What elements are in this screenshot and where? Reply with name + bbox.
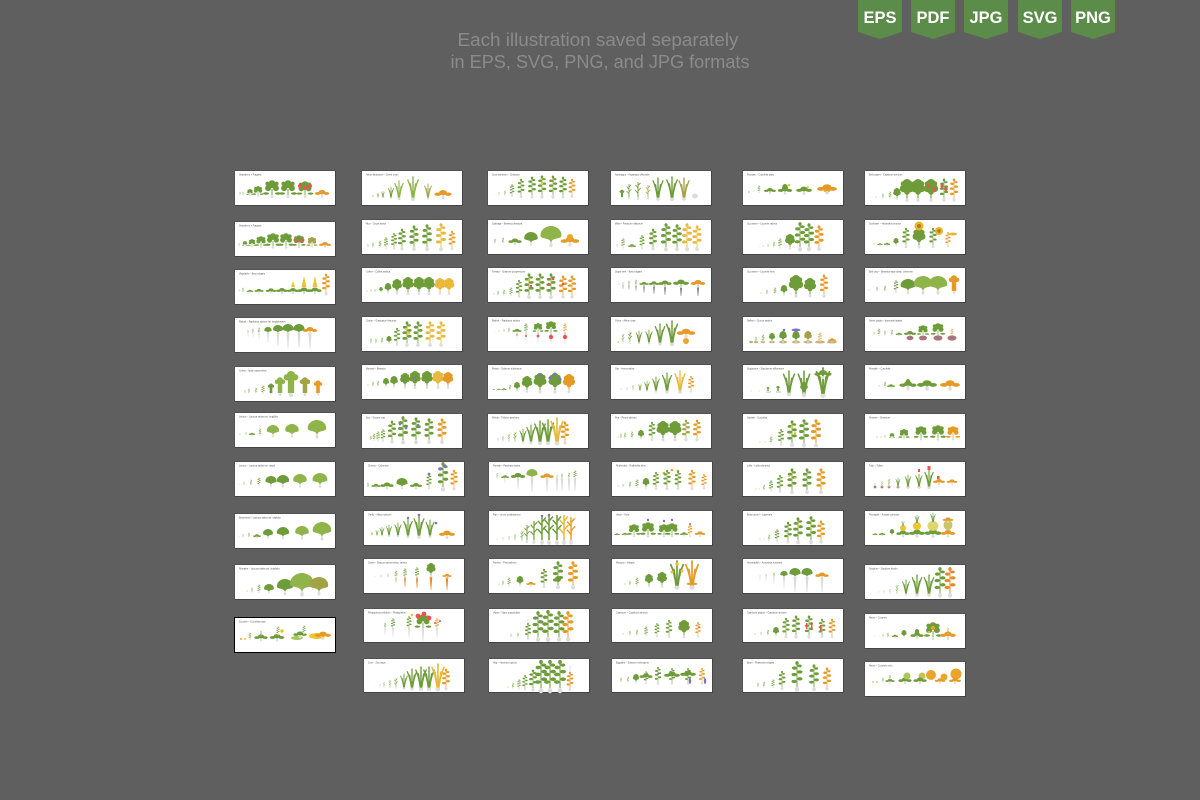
card: saffron with soil — [742, 316, 844, 352]
card: cucumber — [742, 220, 844, 255]
card: romaine lettuce: Romaine – Lactuca sativa var. longifolia — [239, 568, 280, 570]
badge: PDF: PDF — [916, 9, 950, 27]
card: hops — [488, 658, 590, 693]
card: onion: Onion – Allium cepa — [615, 320, 636, 322]
card: tomato: Tomato – Solanum lycopersicum — [492, 270, 525, 274]
card: daikon radish: Radish – Raphanus sativus var. longipinnatus — [239, 320, 286, 324]
card: sunflower: Sunflower – Helianthus annuus — [869, 222, 902, 226]
badge: EPS — [858, 0, 902, 39]
card: asparagus: Asparagus – Asparagus officinalis — [615, 174, 650, 176]
card: melon — [864, 662, 966, 697]
card: sorghum — [864, 564, 966, 600]
card: flax — [364, 510, 465, 546]
card: zucchini (selected, black frame): Zucchini – Cucurbita pepo — [239, 620, 266, 624]
card: wide herb with blue flowers: Chicory – Cichorium — [368, 464, 389, 468]
card: pumpkin — [742, 170, 844, 206]
card: zucchini (selected, black frame) — [234, 617, 336, 653]
card: parsnip — [488, 462, 590, 497]
card: pea: Pea – Pisum sativum — [615, 416, 637, 420]
badge: PNG: PNG — [1075, 9, 1111, 27]
card: celery — [234, 366, 336, 402]
card: lettuce 1: Lettuce – Lactuca sativa var. longifolia — [239, 416, 279, 418]
badge: JPG — [964, 0, 1008, 39]
card: vetch with purple flowers: Vetch – Vicia — [616, 514, 630, 516]
card: flax: Garlic – Allium sativum — [368, 514, 391, 516]
card: carrot: Carrot – Daucus carota subsp. sativus — [368, 562, 408, 564]
card: lettuce 1 — [234, 412, 336, 448]
card: onion: Allium fistulosum – Green onion — [366, 174, 399, 176]
card: rudbeckia: Rudbeckia – Rudbeckia hirta — [616, 464, 646, 468]
card: round bushes — [362, 364, 463, 400]
card: strawberry 2 — [234, 222, 336, 257]
badge: EPS: EPS — [863, 9, 897, 27]
card: butterhead lettuce: Butterhead – Lactuca sativa var. capitata — [239, 516, 281, 520]
card: mustard — [612, 558, 713, 594]
card: bush bean: Bean – Phaseolus vulgaris — [747, 662, 775, 664]
card: round bushes: Mustard – Brassica — [366, 368, 386, 370]
card: sunflower — [864, 220, 966, 255]
card: tomato — [488, 268, 589, 303]
card: flowering plant — [362, 316, 463, 352]
card: wheat — [488, 414, 589, 449]
card: beet: Vegetable – Beta vulgaris — [239, 272, 266, 276]
card: sweet potato — [864, 316, 966, 352]
card: parsnip: Parsnip – Pastinaca sativa — [493, 464, 521, 468]
card: pineapple: Pineapple – Ananas comosus — [869, 514, 900, 516]
card: radish: Radish – Raphanus sativus — [492, 320, 521, 322]
card: geranium — [364, 608, 465, 643]
card: oat: Oat – Avena sativa — [615, 368, 635, 370]
card: bean plant with purple flowers: Soy – Glycine max — [366, 418, 386, 420]
card: melon bush: Melon – Cucumis — [869, 618, 888, 620]
badge: SVG — [1018, 0, 1062, 39]
card: millet: Millet – Panicum miliaceum — [615, 222, 643, 226]
card: onion — [362, 170, 463, 206]
card: rice: Rice – Oryza sativa — [366, 222, 387, 226]
card: bean plant with purple flowers — [362, 414, 463, 449]
card: oat — [610, 364, 712, 400]
card: sugarcane palm: Sugarcane – Saccharum officinarum — [747, 368, 784, 370]
card: horseradish — [742, 558, 844, 594]
card: pumpkin: Pumpkin – Cucurbita pepo — [747, 174, 775, 176]
card: bok choy — [864, 268, 966, 303]
card: pineapple — [864, 510, 966, 546]
card: bush bean — [742, 658, 844, 693]
card: corn — [364, 658, 465, 693]
card: squash low — [864, 364, 966, 400]
card: cabbage — [488, 220, 589, 255]
card: bottle gourd: Bottle gourd – Lagenaria — [747, 514, 773, 516]
card: luffa — [742, 462, 844, 497]
badge: JPG: JPG — [969, 9, 1003, 27]
card: potato — [488, 364, 589, 400]
card: vetch with purple flowers — [612, 510, 713, 546]
card: corn: Corn – Zea mays — [368, 662, 386, 664]
card: romaine lettuce — [234, 564, 336, 600]
card: sweet potato: Sweet potato – Ipomoea batatas — [869, 320, 903, 322]
card: squash plant: Squash – Cucurbita — [747, 416, 768, 420]
card: squash plant — [742, 414, 844, 449]
card: melon: Melon – Cucumis melo — [869, 666, 893, 668]
heading: in EPS, SVG, PNG, and JPG formats — [450, 52, 750, 72]
card: butterhead lettuce — [234, 514, 336, 549]
card: potato: Potato – Solanum tuberosum — [492, 368, 522, 370]
card: strawberry 1 — [234, 170, 336, 206]
card: melon bush — [864, 614, 966, 649]
card: lettuce 2: Lettuce – Lactuca sativa var. crispa — [239, 464, 276, 468]
card: onion — [610, 316, 712, 352]
card: bell pepper — [864, 170, 966, 206]
card: bell pepper: Bell pepper – Capsicum annuum — [869, 174, 902, 176]
card: horseradish: Horseradish – Armoracia rusticana — [747, 562, 783, 564]
card: eggplant — [612, 658, 713, 693]
card: pea — [610, 414, 712, 449]
card: tulip: Tulip – Tulipa — [869, 466, 883, 468]
card: squash low: Pumpkin – Cucurbita — [869, 368, 891, 370]
card: cabbage: Cabbage – Brassica oleracea — [492, 222, 523, 226]
badge: PNG — [1071, 0, 1115, 39]
card: eggplant: Eggplant – Solanum melongena — [616, 662, 649, 664]
card: saffron with soil: Saffron – Crocus sativus — [747, 320, 773, 322]
card: bok choy: Bok choy – Brassica rapa subsp. chinensis — [869, 270, 914, 274]
card: rudbeckia — [612, 462, 713, 497]
card: sugar beet dark root: Sugar beet – Beta vulgaris — [615, 270, 643, 274]
card: capsicum vine — [612, 608, 713, 643]
card: wheat: Wheat – Triticum aestivum — [492, 416, 519, 420]
card: leafy herb — [488, 558, 590, 594]
card: chickpea — [488, 170, 589, 206]
heading: Each illustration saved separately — [458, 30, 738, 50]
card: flowering plant: Cotton – Gossypium hirsutum — [366, 320, 396, 322]
card: capsicum vine: Capsicum – Capsicum annuum — [616, 612, 648, 614]
card: luffa: Luffa – Luffa cylindrica — [747, 464, 771, 468]
card: olive-shaped bush — [362, 268, 463, 303]
card: hops: Hop – Humulus lupulus — [493, 662, 518, 664]
card: tulip — [864, 462, 966, 497]
card: strawberry 1: Strawberry × Fragaria — [239, 174, 262, 176]
card: carrot — [364, 558, 465, 594]
card: cucumber: Cucumber – Cucumis sativus — [747, 222, 778, 226]
card: chili pepper: Capsicum pepper – Capsicum annuum — [747, 612, 787, 614]
card: sesame — [864, 414, 966, 449]
card: climbing bean: Vigna – Vigna unguiculata — [493, 612, 520, 614]
badge: SVG: SVG — [1023, 9, 1057, 27]
card: wide herb with blue flowers — [364, 462, 465, 497]
card: chili pepper — [742, 608, 844, 643]
card: sesame: Sesame – Sesamum — [869, 418, 890, 420]
card: bottle gourd — [742, 510, 844, 546]
card: melon: Cucumber – Cucumis melo — [747, 270, 775, 274]
card: radish — [488, 316, 589, 352]
card: asparagus — [610, 170, 712, 206]
card: geranium: Pelargonium peltatum – Pelargonium — [368, 612, 406, 614]
card: chickpea: Cicer arietinum – Chickpea — [492, 174, 520, 176]
badge: PDF — [911, 0, 955, 39]
card: leafy herb: Parsley – Petroselinum — [493, 562, 517, 564]
card: daikon radish — [234, 318, 336, 353]
card: celery: Celery – Apium graveolens — [239, 370, 267, 372]
card: beet — [234, 270, 336, 305]
card: tall stalk flax: Flax – Linum usitatissimum — [493, 514, 521, 516]
card: tall stalk flax — [488, 510, 590, 546]
card: strawberry 2: Strawberry × Fragaria — [239, 224, 262, 228]
card: sugarcane palm — [742, 364, 844, 400]
card: rice — [362, 220, 463, 255]
card: melon — [742, 268, 844, 303]
card: sorghum: Sorghum – Sorghum bicolor — [869, 568, 898, 570]
card: sugar beet dark root — [610, 268, 712, 303]
heading — [450, 30, 750, 72]
card: mustard: Mustard – Sinapis — [616, 562, 635, 564]
card: climbing bean — [488, 608, 590, 643]
card: lettuce 2 — [234, 462, 336, 497]
card: olive-shaped bush: Coffee – Coffea arabica — [366, 270, 391, 274]
card: millet — [610, 220, 712, 255]
